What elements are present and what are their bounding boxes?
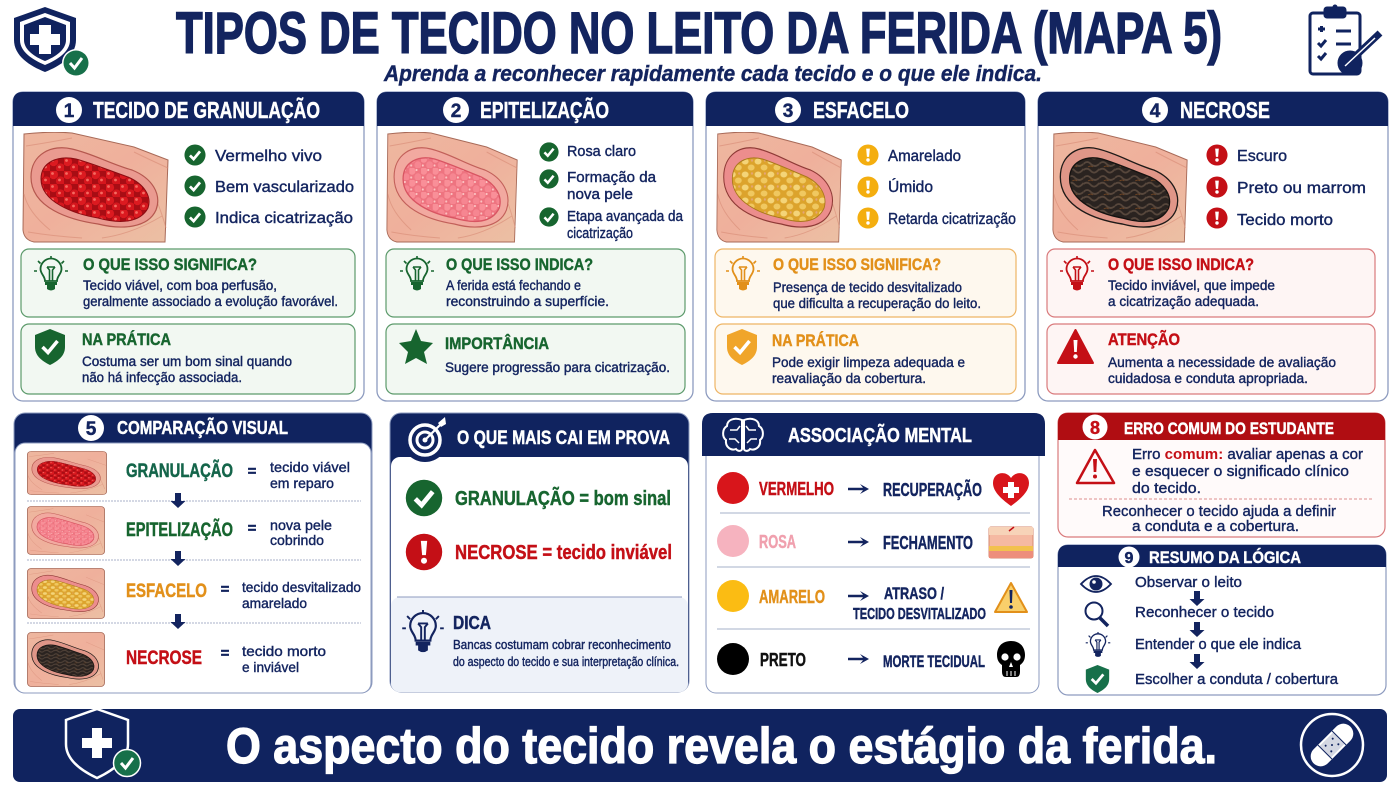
icon: footer shield	[66, 709, 140, 778]
row: amarelo atraso: ATRASO /	[884, 584, 944, 603]
box: na prática	[21, 324, 355, 394]
panel 9 header	[1058, 545, 1386, 568]
conclusion text	[1102, 503, 1336, 535]
icon: bulb	[1086, 632, 1110, 657]
box: importância: Sugere progressão para cicatrização.	[445, 360, 670, 375]
row: esfacelo: ESFACELO	[126, 581, 207, 602]
box: atenção: Aumenta a necessidade de avaliação	[1108, 355, 1336, 370]
row: necrose: =	[221, 645, 230, 662]
feature list: Bem vascularizado	[215, 179, 354, 196]
step list: Entender o que ele indica	[1135, 637, 1302, 653]
box: na prática	[715, 324, 1016, 394]
panel 2 header	[377, 92, 693, 126]
row: epitelização: =	[248, 520, 257, 537]
error text	[1132, 446, 1363, 497]
step list	[1135, 575, 1339, 688]
row: preto morte tecidual: MORTE TECIDUAL	[883, 652, 985, 671]
panel 4 header: 4	[1150, 101, 1161, 122]
panel 7 header	[723, 419, 972, 451]
wound image: esfacelo	[717, 132, 841, 242]
panel 1 header: TECIDO DE GRANULAÇÃO	[93, 96, 320, 123]
box: o que isso significa: Presença de tecido desvitalizado	[773, 280, 962, 295]
step arrows	[1190, 591, 1204, 669]
dica box: Bancas costumam cobrar reconhecimento	[453, 638, 671, 652]
row: necrose: tecido morto	[242, 643, 326, 659]
dica box: DICA	[453, 613, 491, 633]
panel 8: erro comum do estudante	[1058, 413, 1385, 537]
box: importância	[386, 324, 685, 394]
row: epitelização	[28, 506, 332, 555]
row: necrose	[28, 632, 326, 687]
feature list	[539, 142, 684, 242]
box: o que isso indica: reconstruindo a superfície.	[446, 294, 609, 309]
item: granulação bom sinal	[406, 480, 671, 516]
feature list: Úmido	[888, 179, 933, 196]
box: o que isso indica: O QUE ISSO INDICA?	[446, 255, 593, 274]
dica box	[391, 597, 688, 692]
row: amarelo atraso	[717, 580, 1027, 623]
icon: medical shield	[14, 7, 90, 77]
panel 3: esfacelo	[706, 92, 1025, 401]
box: o que isso significa: Tecido viável, com boa perfusão,	[83, 278, 277, 293]
box: na prática: NA PRÁTICA	[82, 330, 171, 349]
wound image: epitelização	[387, 132, 517, 242]
feature list	[1206, 144, 1366, 229]
step list: Observar o leito	[1135, 575, 1242, 591]
box: na prática: Pode exigir limpeza adequada e	[772, 355, 965, 370]
panel 1: tecido de granulação	[13, 92, 364, 401]
subtitle: Aprenda a reconhecer rapidamente cada tecido e o que ele indica.	[383, 61, 1042, 86]
icon: warning triangle	[1077, 450, 1114, 483]
panel 9: resumo da lógica	[1058, 545, 1386, 695]
conclusion text: a conduta e a cobertura.	[1132, 518, 1299, 535]
box: o que isso significa: O QUE ISSO SIGNIFICA?	[83, 255, 257, 274]
row: rosa fechamento: FECHAMENTO	[883, 533, 973, 553]
box: o que isso indica: Tecido inviável, que impede	[1108, 278, 1275, 293]
box: na prática: Costuma ser um bom sinal quando	[82, 354, 292, 369]
row: granulação: tecido viável	[270, 459, 350, 475]
feature list	[184, 144, 354, 228]
row: vermelho recuperação	[717, 472, 1029, 506]
icon: eye	[1081, 576, 1111, 592]
row: rosa fechamento	[717, 525, 1033, 558]
feature list: Retarda cicatrização	[888, 211, 1016, 228]
row: vermelho recuperação: RECUPERAÇÃO	[883, 479, 982, 500]
feature list	[857, 144, 1016, 229]
panel 5 header	[78, 415, 288, 441]
row: epitelização: nova pele	[270, 517, 332, 533]
panel 3 header: ESFACELO	[813, 97, 909, 123]
error text: do tecido.	[1132, 480, 1201, 497]
box: o que isso indica	[386, 249, 685, 317]
box: o que isso significa	[715, 249, 1016, 317]
panel 4 header	[1038, 92, 1388, 126]
row: esfacelo	[28, 568, 361, 619]
feature list: Preto ou marrom	[1237, 180, 1366, 197]
box: atenção	[1047, 324, 1375, 394]
panel 3 header: 3	[783, 101, 793, 122]
item: necrose tecido inviável	[406, 534, 672, 570]
error text: e esquecer o significado clínico	[1132, 463, 1349, 480]
panel 9 header: 9	[1125, 550, 1134, 567]
box: o que isso indica	[1047, 249, 1375, 317]
row: preto morte tecidual: PRETO	[760, 650, 806, 670]
wound image: necrose	[1053, 132, 1187, 242]
panel 1 header	[13, 92, 364, 126]
feature list: nova pele	[567, 187, 633, 203]
row: epitelização: EPITELIZAÇÃO	[126, 519, 233, 541]
box: atenção: ATENÇÃO	[1108, 329, 1180, 349]
feature list: Vermelho vivo	[215, 148, 322, 165]
panel 2 header: EPITELIZAÇÃO	[480, 96, 609, 123]
step list: Reconhecer o tecido	[1135, 605, 1274, 621]
panel 9 header: RESUMO DA LÓGICA	[1149, 548, 1301, 567]
row: vermelho recuperação: VERMELHO	[759, 479, 834, 499]
row: esfacelo: tecido desvitalizado	[242, 579, 361, 595]
wound image: granulação	[23, 132, 168, 242]
box: na prática: reavaliação da cobertura.	[772, 371, 926, 386]
box: o que isso significa	[21, 249, 355, 317]
box: importância: IMPORTÂNCIA	[445, 334, 549, 353]
step list: Escolher a conduta / cobertura	[1135, 672, 1339, 688]
panel 7: associação mental	[702, 413, 1045, 693]
box: o que isso indica: a cicatrização adequada.	[1108, 294, 1259, 309]
row: preto morte tecidual	[717, 641, 1025, 677]
row: granulação: GRANULAÇÃO	[126, 460, 233, 482]
box: na prática: NA PRÁTICA	[772, 331, 859, 350]
row: granulação	[28, 451, 350, 495]
arrows between rows	[170, 493, 186, 629]
feature list: Escuro	[1237, 148, 1287, 165]
panel 8 header: ERRO COMUM DO ESTUDANTE	[1124, 419, 1334, 438]
panel 2 header: 2	[451, 101, 461, 122]
box: na prática: não há infecção associada.	[82, 370, 242, 385]
feature list: Rosa claro	[567, 144, 636, 160]
feature list: Etapa avançada da	[567, 209, 684, 225]
row: esfacelo: amarelado	[242, 595, 307, 611]
row: granulação: em reparo	[270, 475, 334, 491]
panel 4: necrose	[1038, 92, 1388, 401]
panel 4 header: NECROSE	[1180, 97, 1270, 123]
panel 3 header	[706, 92, 1025, 126]
panel 1 header: 1	[64, 101, 75, 122]
row: rosa fechamento: ROSA	[759, 532, 796, 552]
feature list: Amarelado	[888, 148, 961, 165]
row: necrose: e inviável	[242, 659, 299, 675]
feature list: Indica cicatrização	[215, 210, 353, 227]
dica box: do aspecto do tecido e sua interpretação clínica.	[453, 655, 679, 669]
panel 6 header	[402, 416, 670, 462]
footer message: O aspecto do tecido revela o estágio da ferida.	[226, 718, 1217, 774]
icon: bandage	[1301, 714, 1363, 776]
conclusion text: Reconhecer o tecido ajuda a definir	[1102, 503, 1336, 520]
panel 8 header: 8	[1090, 418, 1100, 438]
panel 5 header: COMPARAÇÃO VISUAL	[117, 417, 288, 438]
box: o que isso significa: O QUE ISSO SIGNIFICA?	[773, 255, 941, 274]
feature list: cicatrização	[567, 226, 633, 242]
icon: green shield	[1086, 665, 1109, 693]
panel 7 header: ASSOCIAÇÃO MENTAL	[788, 424, 972, 447]
row: granulação: =	[248, 463, 257, 480]
feature list: Tecido morto	[1237, 212, 1333, 229]
item: granulação bom sinal: GRANULAÇÃO = bom sinal	[455, 487, 671, 510]
box: o que isso indica: O QUE ISSO INDICA?	[1108, 255, 1254, 274]
feature list: Formação da	[567, 170, 657, 186]
row: esfacelo: =	[221, 581, 230, 598]
row: necrose: NECROSE	[126, 648, 202, 669]
footer banner	[13, 709, 1387, 782]
row: amarelo atraso: TECIDO DESVITALIZADO	[853, 606, 986, 623]
panel 6 header: O QUE MAIS CAI EM PROVA	[457, 427, 670, 449]
panel 2: epitelização	[377, 92, 693, 401]
item: necrose tecido inviável: NECROSE = tecido inviável	[455, 542, 672, 564]
row: amarelo atraso: AMARELO	[759, 587, 825, 607]
box: o que isso significa: que dificulta a recuperação do leito.	[773, 296, 981, 311]
box: o que isso significa: geralmente associado a evolução favorável.	[83, 294, 338, 309]
panel 5 header: 5	[86, 419, 97, 440]
row: epitelização: cobrindo	[270, 532, 324, 548]
icon: magnifier	[1086, 602, 1108, 626]
box: o que isso indica: A ferida está fechando e	[446, 278, 581, 293]
panel 5: comparação visual	[14, 413, 372, 693]
icon: clipboard checklist	[1310, 4, 1380, 74]
panel 8 header	[1058, 413, 1385, 440]
panel 6: o que mais cai em prova	[390, 413, 689, 692]
box: atenção: cuidadosa e conduta apropriada.	[1108, 371, 1308, 386]
error text: Erro comum: avaliar apenas a cor	[1132, 446, 1363, 463]
